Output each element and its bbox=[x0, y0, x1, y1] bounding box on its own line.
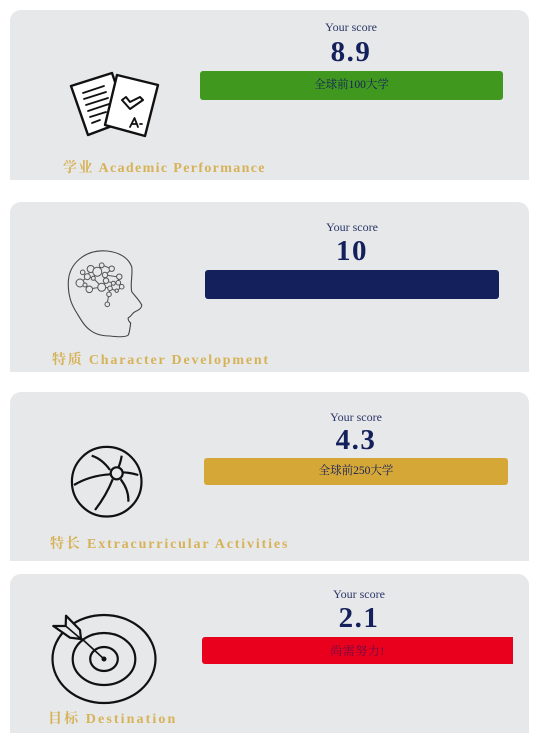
score value 4.3: 4.3 bbox=[336, 424, 376, 456]
icon: head with brain network bbox=[68, 250, 142, 338]
panel: destination bbox=[10, 574, 529, 733]
heading: academic performance: 学业 Academic Performance bbox=[63, 161, 266, 176]
score caption: Your score bbox=[326, 220, 378, 234]
panel: character development bbox=[10, 202, 529, 372]
score value 2.1: 2.1 bbox=[339, 602, 379, 634]
heading: destination: 目标 Destination bbox=[48, 712, 177, 727]
panel: academic performance bbox=[10, 10, 529, 180]
icon: target with arrow bbox=[51, 614, 157, 704]
score value 10: 10 bbox=[336, 235, 368, 267]
score bar: top 250 bbox=[204, 458, 508, 485]
score caption: Your score bbox=[330, 410, 382, 424]
score bar: top 100 bbox=[200, 71, 503, 100]
score caption: Your score bbox=[325, 20, 377, 34]
icon: graded papers bbox=[70, 72, 160, 138]
score bar: needs effort bbox=[202, 637, 513, 664]
score bar: top 250: 全球前250大学 bbox=[319, 465, 393, 477]
score value 8.9: 8.9 bbox=[331, 36, 371, 68]
heading: character development: 特质 Character Development bbox=[52, 353, 270, 368]
heading: extracurricular activities: 特长 Extracurricular Activities bbox=[50, 537, 289, 552]
panel: extracurricular activities bbox=[10, 392, 529, 561]
icon: beach ball bbox=[70, 446, 143, 518]
score bar: top 100: 全球前100大学 bbox=[314, 79, 389, 91]
score caption: Your score bbox=[333, 587, 385, 601]
score bar: needs effort: 尚需努力! bbox=[330, 644, 385, 658]
score bar: full bbox=[205, 270, 499, 299]
